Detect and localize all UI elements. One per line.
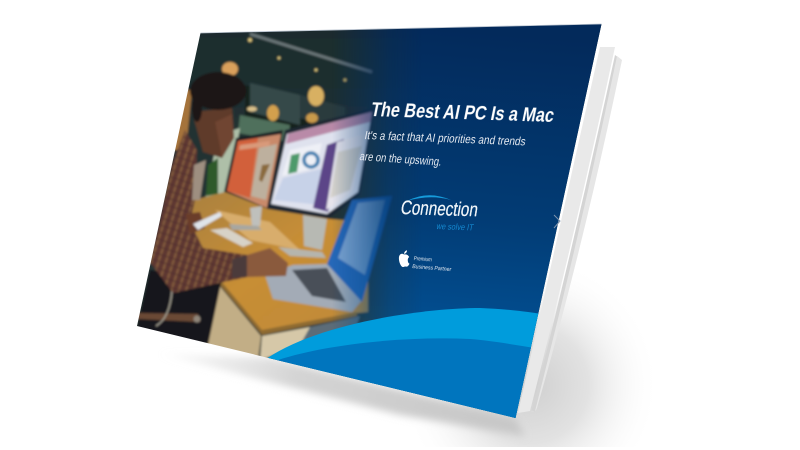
logo wordmark: Connection <box>399 197 480 221</box>
person sweater <box>150 130 247 293</box>
window and plant behind person <box>205 128 240 200</box>
left monitor <box>224 130 283 212</box>
darker blue wave <box>277 338 531 418</box>
Connection logo <box>399 195 480 232</box>
blue gradient overlay <box>334 24 602 418</box>
hands and phone <box>186 212 288 277</box>
Apple partner badge <box>399 250 452 273</box>
laptop <box>265 196 392 312</box>
chevron arrow <box>554 215 560 228</box>
back pages <box>518 47 622 413</box>
ceiling structure and windows <box>170 83 345 150</box>
monitor stands <box>229 206 327 250</box>
partner text: Premium <box>413 256 432 263</box>
cover top edge highlight <box>200 24 602 33</box>
subtitle <box>358 128 527 169</box>
ceiling beam <box>250 34 372 72</box>
person head <box>190 72 246 158</box>
logo tagline: we solve IT <box>435 221 475 232</box>
desk <box>176 192 368 335</box>
cover photo: office scene <box>130 20 610 420</box>
pendant lamps <box>222 38 346 123</box>
light blue wave <box>268 308 538 418</box>
partner text <box>412 256 452 273</box>
title: The Best AI PC Is a Mac <box>369 98 556 127</box>
subtitle: It's a fact that AI priorities and trends <box>363 128 527 148</box>
logo swoosh <box>407 195 451 201</box>
subtitle: are on the upswing. <box>358 149 443 169</box>
ebook mockup scene <box>137 24 622 447</box>
keyboard <box>210 228 253 247</box>
person trousers and chair <box>137 270 222 345</box>
partner text: Business Partner <box>412 264 452 273</box>
person shirt <box>192 160 206 200</box>
right monitor <box>268 108 375 219</box>
cover <box>130 20 610 430</box>
desk cabinet <box>205 284 360 360</box>
ground shadow <box>160 255 662 447</box>
icon: apple logo <box>399 250 410 267</box>
